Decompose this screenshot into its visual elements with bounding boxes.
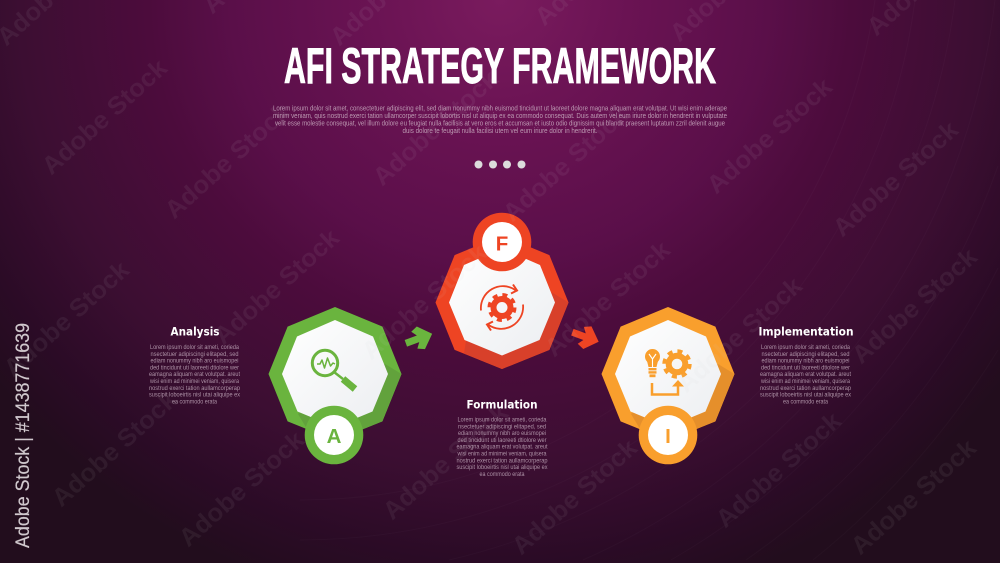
watermarks: Adobe Stock <box>847 243 983 369</box>
watermarks: Adobe Stock <box>368 65 504 191</box>
text block: implementation: ediam nonummy nibh aro euismopei <box>762 358 850 365</box>
text block: analysis: Lorem ipsum dolor sit ameti, corieda <box>150 344 239 351</box>
text block: formulation: ediam nonummy nibh aro euismopei <box>458 430 546 437</box>
text block: formulation <box>456 416 548 478</box>
badge: F: F <box>496 232 508 256</box>
icon: bulb, gear and connector <box>645 349 690 394</box>
watermarks: Adobe Stock <box>540 236 676 362</box>
text block: analysis: wisi enim ad minimei veniam, quisera <box>149 378 239 385</box>
intro paragraph <box>273 104 727 135</box>
watermarks: Adobe Stock <box>357 239 493 365</box>
arrow: formulation to implementation <box>568 321 603 353</box>
panel: analysis octagon <box>268 307 402 464</box>
heading: formulation: Formulation <box>466 398 538 412</box>
watermarks: Adobe Stock <box>0 256 135 382</box>
heading: analysis: Analysis <box>170 324 220 338</box>
text block: implementation <box>760 344 852 405</box>
text block: analysis: ea commodo erata <box>172 398 217 405</box>
text block: formulation: Lorem ipsum dolor sit ameti, corieda <box>458 416 547 424</box>
intro paragraph: duis dolore te feugait nulla facilisi utem vel eum iriure dolor in hendrerit. <box>402 126 598 135</box>
panel: formulation octagon <box>436 213 568 369</box>
panel: implementation text <box>758 324 854 405</box>
text block: formulation: wisi enim ad minimei veniam, quisera <box>457 450 547 458</box>
intro paragraph: minim veniam, quis nostrud exerci tation ullamcorper suscipit lobortis nisl ut aliquip ex ea commodo consequat. Duis autem vel eum iriure dolor in hendrerit in vulputate <box>273 111 727 120</box>
text block: analysis: nsectetuer adipiscingi elitaped, sed <box>150 351 239 358</box>
text block: analysis <box>149 344 241 405</box>
text block: formulation: nsectetuer adipiscingi elitaped, sed <box>458 423 546 430</box>
watermarks: Adobe Stock <box>174 426 310 552</box>
heading: implementation: Implementation <box>758 324 854 338</box>
badge: A: A <box>327 425 342 448</box>
panel: implementation octagon <box>602 307 734 464</box>
panel: formulation text <box>456 398 548 478</box>
arrow: analysis to formulation <box>402 322 436 355</box>
text block: formulation: suscipit loboeirtis nisl utai aliquipe ex <box>456 464 548 471</box>
panel: analysis text <box>149 324 241 405</box>
watermarks: Adobe Stock <box>672 272 808 398</box>
watermarks: Adobe Stock <box>160 98 296 224</box>
watermarks: Adobe Stock <box>507 434 643 560</box>
badge: I: I <box>665 425 671 448</box>
text block: formulation: ea commodo erata <box>480 471 525 478</box>
watermarks: Adobe Stock <box>498 101 634 227</box>
text block: implementation: nostrud exerci tation aullamcorperap <box>760 385 851 392</box>
icon: magnifier with pulse <box>312 350 355 389</box>
text block: analysis: suscipit loboeirtis nisl utai aliquipe ex <box>149 392 241 399</box>
icon: gear with cycle arrows <box>481 284 523 330</box>
pagination dots <box>474 160 526 168</box>
watermarks: Adobe Stock <box>37 54 173 180</box>
text block: formulation: nostrud exerci tation aullamcorperap <box>456 457 548 464</box>
text block: formulation: ded tincidunt uti laoreeti dtiolore wer <box>458 437 547 444</box>
intro paragraph: Lorem ipsum dolor sit amet, consectetuer adipiscing elit, sed diam nonummy nibh euismod tincidunt ut laoreet dolore magna aliquam erat volutpat. Ut wisi enim aderape <box>273 104 727 112</box>
watermarks: Adobe Stock <box>828 116 964 242</box>
text block: analysis: nostrud exerci tation aullamcorperap <box>149 385 240 392</box>
text block: implementation: eamagna aliquam erat volutpat. areut <box>760 371 851 378</box>
intro paragraph: velit esse molestie consequat, vel illum dolore eu feugiat nulla facilisis at vero eros et accumsan et iusto odio dignissim qui blandit praesent luptatum zzril delenit augue <box>275 118 725 128</box>
text block: implementation: nsectetuer adipiscingi elitaped, sed <box>762 351 850 358</box>
watermarks: Adobe Stock <box>47 386 183 512</box>
badge: I <box>639 406 697 464</box>
title: AFI STRATEGY FRAMEWORK <box>284 38 716 94</box>
text block: formulation: eamagna aliquam erat volutpat. areut <box>456 444 548 451</box>
watermarks: Adobe Stock <box>378 399 514 525</box>
stock id side label: Adobe Stock | #1438771639 <box>13 323 34 548</box>
text block: analysis: eamagna aliquam erat volutpat. areut <box>149 371 240 378</box>
text block: implementation: ea commodo erata <box>783 398 828 405</box>
watermarks: Adobe Stock <box>702 73 838 199</box>
watermarks: Adobe Stock <box>209 224 345 350</box>
text block: implementation: ded tincidunt uti laoreeti dtiolore wer <box>761 364 851 371</box>
watermarks: Adobe Stock <box>711 407 847 533</box>
text block: analysis: ded tincidunt uti laoreeti dtiolore wer <box>150 364 240 371</box>
text block: implementation: wisi enim ad minimei veniam, quisera <box>760 378 850 385</box>
watermarks: Adobe Stock <box>846 434 982 560</box>
text block: implementation: Lorem ipsum dolor sit ameti, corieda <box>761 344 850 351</box>
text block: implementation: suscipit loboeirtis nisl utai aliquipe ex <box>760 392 852 399</box>
text block: analysis: ediam nonummy nibh aro euismopei <box>150 358 239 365</box>
badge: A <box>305 406 363 464</box>
badge: F <box>473 213 531 271</box>
